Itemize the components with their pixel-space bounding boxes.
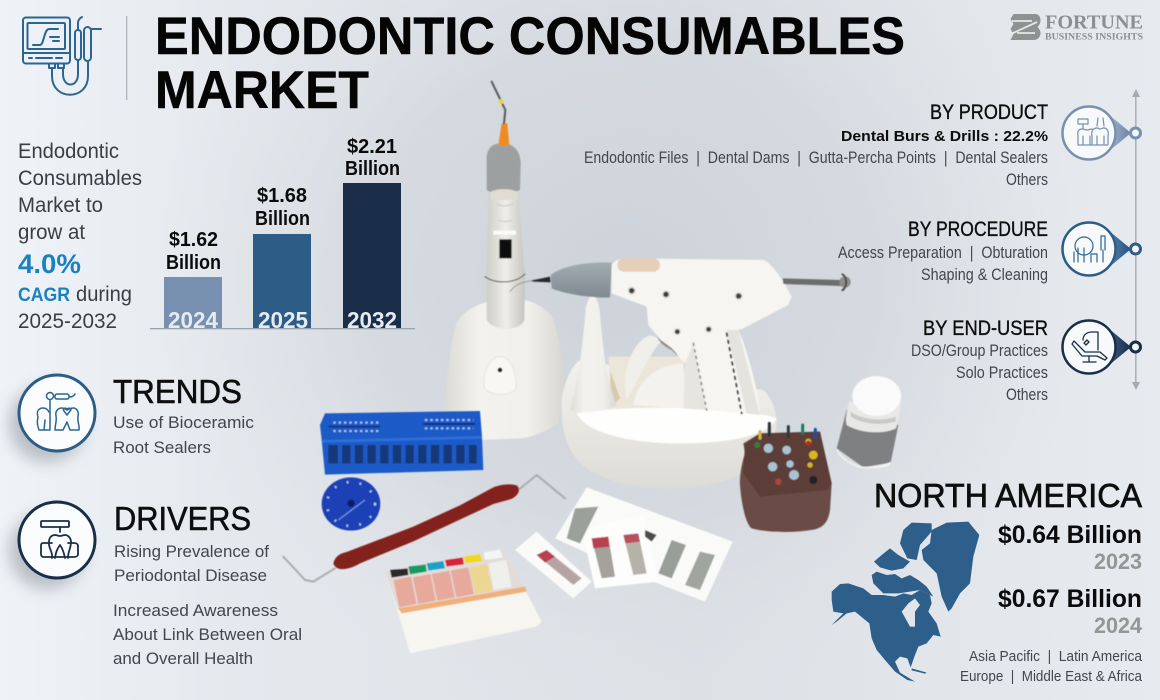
drivers text: and Overall Health bbox=[113, 650, 253, 668]
CAGR text block: Endodontic bbox=[18, 140, 119, 163]
panel: by product bbox=[584, 101, 1140, 189]
end-user list: DSO/Group Practices bbox=[911, 342, 1048, 360]
icon: end-user pin bbox=[1062, 320, 1140, 374]
panel: drivers bbox=[9, 500, 302, 668]
CAGR text block: 4.0% bbox=[18, 249, 81, 279]
CAGR text block: 2025-2032 bbox=[18, 310, 117, 333]
trends text: Root Sealers bbox=[113, 439, 211, 457]
end-user list: Solo Practices bbox=[956, 364, 1048, 382]
panel: by procedure bbox=[838, 218, 1140, 284]
bar 2025 bbox=[253, 185, 311, 333]
trends text: Use of Bioceramic bbox=[113, 414, 254, 432]
title: MARKET bbox=[155, 61, 369, 120]
bar 2025: $1.68 bbox=[257, 185, 307, 207]
drivers text: Periodontal Disease bbox=[114, 567, 267, 585]
panel: trends bbox=[9, 373, 254, 462]
procedure list: Access Preparation | Obturation bbox=[838, 244, 1048, 262]
icon: procedure pin bbox=[1062, 222, 1140, 276]
other regions bbox=[960, 648, 1143, 685]
bar 2025: 2025 bbox=[258, 307, 308, 333]
other regions: Asia Pacific | Latin America bbox=[969, 648, 1143, 665]
heading: by end-user: BY END-USER bbox=[923, 317, 1048, 340]
bar 2032 bbox=[343, 136, 401, 333]
red hand instrument bbox=[283, 475, 565, 582]
drivers text: Rising Prevalence of bbox=[114, 543, 269, 561]
value 2023: 2023 bbox=[1094, 549, 1142, 574]
icon: trends tooth circle bbox=[9, 375, 95, 462]
bar 2032: Billion bbox=[345, 158, 400, 180]
CAGR text block bbox=[18, 140, 142, 333]
panel: by end-user bbox=[911, 317, 1140, 404]
value 2023: $0.64 Billion bbox=[998, 521, 1142, 549]
icon: drivers tooth circle bbox=[9, 502, 95, 589]
bar 2032: $2.21 bbox=[347, 136, 397, 158]
value 2024: $0.67 Billion bbox=[998, 585, 1142, 613]
panel: north america bbox=[832, 477, 1143, 685]
other regions: Europe | Middle East & Africa bbox=[960, 668, 1143, 685]
icon: endodontic motor device bbox=[23, 17, 101, 95]
title bbox=[155, 7, 905, 120]
value 2024 bbox=[998, 585, 1143, 638]
bar 2032: 2032 bbox=[347, 307, 397, 333]
logo: Fortune Business Insights bbox=[1007, 12, 1143, 42]
end-user list: Others bbox=[1006, 386, 1048, 404]
end-user list bbox=[911, 342, 1048, 404]
trends text bbox=[113, 414, 254, 457]
drivers text bbox=[113, 543, 302, 668]
procedure list: Shaping & Cleaning bbox=[921, 266, 1048, 284]
bar 2024: 2024 bbox=[168, 307, 218, 333]
CAGR text block: Market to bbox=[18, 194, 103, 217]
handpiece on stand bbox=[445, 82, 563, 440]
product list: Endodontic Files | Dental Dams | Gutta-Percha Points | Dental Sealers bbox=[584, 149, 1048, 167]
bottle bbox=[837, 376, 901, 468]
CAGR text block: grow at bbox=[18, 221, 85, 244]
header divider bbox=[126, 16, 127, 100]
heading: by procedure: BY PROCEDURE bbox=[908, 218, 1048, 241]
logo: Fortune Business Insights: FORTUNE bbox=[1045, 12, 1143, 34]
value 2023 bbox=[998, 521, 1142, 574]
segment timeline bbox=[1132, 89, 1140, 390]
paper point box bbox=[385, 548, 542, 653]
bar 2024 bbox=[164, 229, 222, 333]
product list bbox=[584, 149, 1048, 189]
CAGR text block: during bbox=[76, 283, 132, 306]
CAGR text block: CAGR bbox=[18, 284, 70, 306]
heading: trends: TRENDS bbox=[113, 373, 242, 410]
CAGR text block: Consumables bbox=[18, 167, 142, 190]
bar 2024: $1.62 bbox=[169, 229, 218, 251]
blue file block bbox=[320, 411, 483, 475]
value 2024: 2024 bbox=[1094, 613, 1143, 638]
photo: endodontic products bbox=[283, 82, 901, 653]
bar 2024: Billion bbox=[166, 252, 221, 274]
obturation gun bbox=[531, 258, 851, 488]
drivers text: About Link Between Oral bbox=[113, 626, 302, 644]
product list: Others bbox=[1006, 171, 1048, 189]
drivers text: Increased Awareness bbox=[113, 602, 278, 620]
x-ray cards bbox=[515, 487, 733, 602]
leading product share: Dental Burs & Drills : 22.2% bbox=[841, 129, 1048, 145]
icon: product pin bbox=[1062, 106, 1140, 160]
bar 2025: Billion bbox=[255, 208, 310, 230]
map: north america bbox=[832, 522, 979, 682]
heading: drivers: DRIVERS bbox=[114, 500, 251, 537]
heading: by product: BY PRODUCT bbox=[930, 101, 1048, 124]
bur block bbox=[740, 423, 832, 532]
heading: north america: NORTH AMERICA bbox=[874, 477, 1142, 514]
title: ENDODONTIC CONSUMABLES bbox=[155, 7, 905, 66]
blue measuring disc bbox=[322, 477, 380, 531]
bar chart: market size bbox=[150, 136, 415, 333]
procedure list bbox=[838, 244, 1048, 284]
logo: Fortune Business Insights: BUSINESS INSIGHTS bbox=[1045, 32, 1143, 42]
